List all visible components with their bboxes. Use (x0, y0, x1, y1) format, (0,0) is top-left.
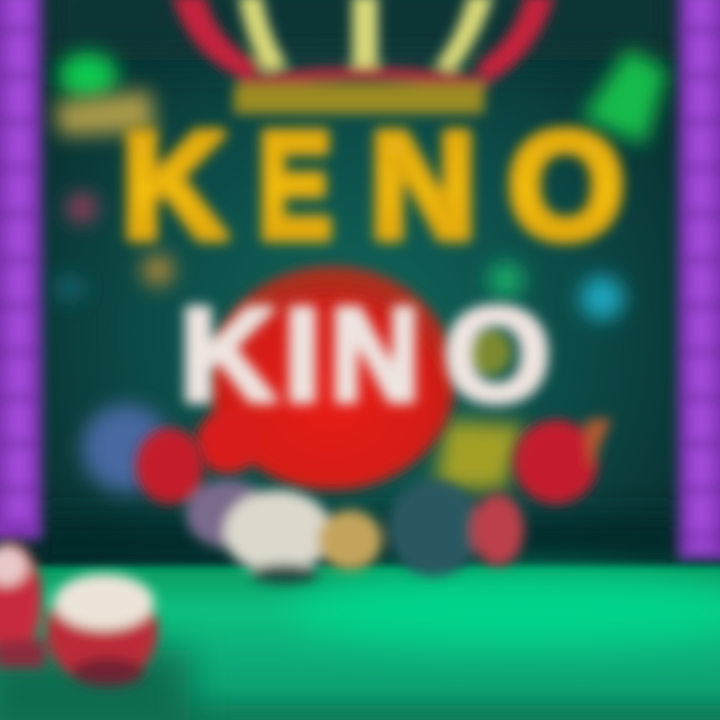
title: KENO: N (370, 101, 476, 269)
panel: left purple column (0, 0, 44, 540)
title: KENO (122, 101, 624, 269)
panel: right purple column (676, 0, 720, 560)
icon: gold side banner (55, 90, 156, 136)
subtitle: KINO: N (330, 281, 420, 428)
top dark band (40, 0, 680, 60)
subtitle: KINO (180, 281, 550, 428)
icon: small balls row (136, 418, 612, 584)
title: KENO: O (508, 101, 624, 269)
title: KENO: E (258, 101, 332, 269)
confetti dots (56, 193, 624, 320)
icon: foreground red and white balls (0, 542, 158, 686)
icon: large red ball (196, 266, 512, 490)
dark floor shadow (30, 520, 690, 565)
icon: blue ball (82, 404, 170, 492)
icon: olive wedge (435, 420, 525, 490)
icon: green spotlights (58, 48, 668, 145)
panel: green table (0, 566, 720, 720)
subtitle: KINO: O (444, 281, 550, 428)
subtitle: KINO: I (284, 281, 321, 428)
title: KENO: K (122, 101, 226, 269)
subtitle: KINO: K (180, 281, 275, 428)
icon: crown (172, 0, 555, 114)
